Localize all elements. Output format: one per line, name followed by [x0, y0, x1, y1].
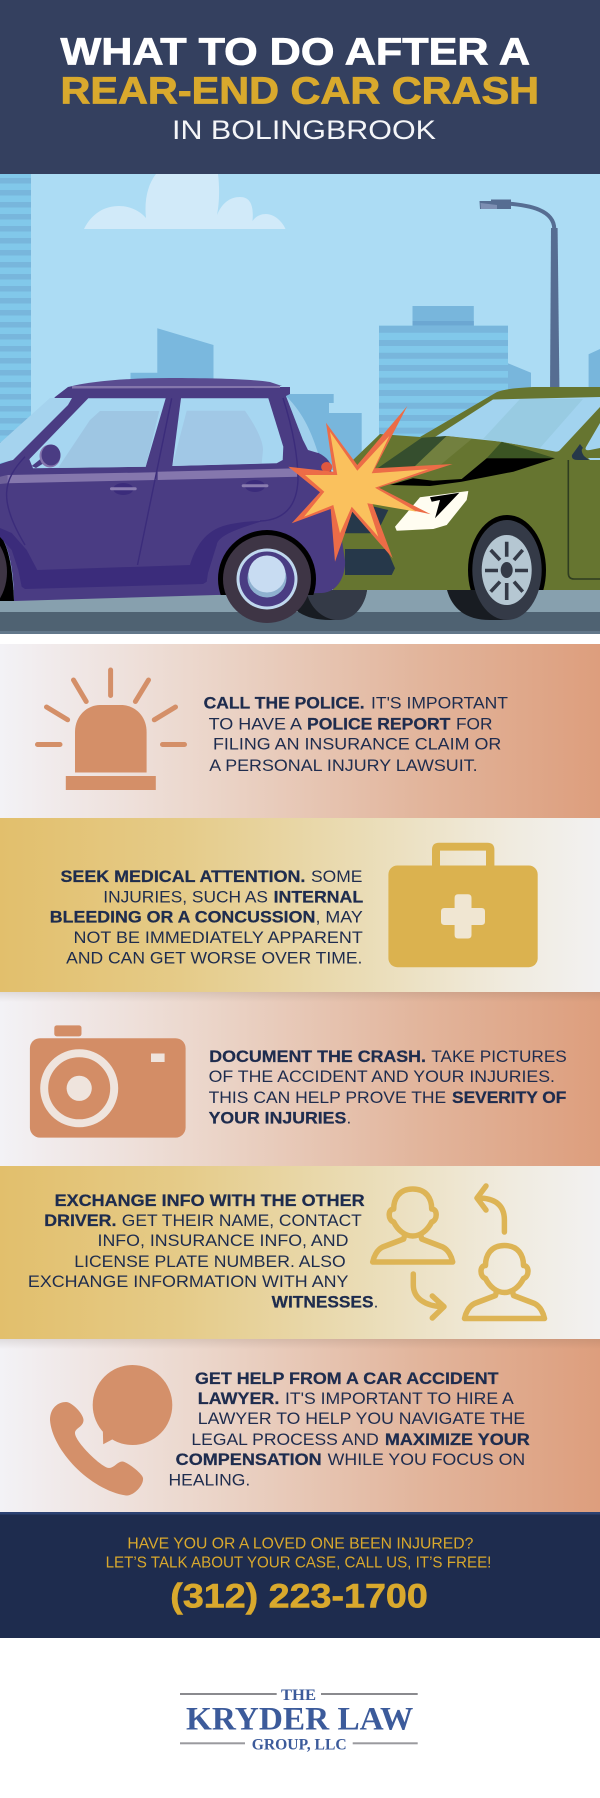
text: lawyer: LAWYER TO HELP YOU NAVIGATE THE: [198, 1409, 525, 1428]
text: lawyer: IT'S IMPORTANT TO HIRE A: [285, 1389, 514, 1408]
text: exchange info: DRIVER.: [44, 1211, 116, 1230]
rear wheel of green car: [297, 590, 367, 620]
panel: document the crash: [0, 992, 600, 1166]
purple car: [0, 378, 345, 628]
black gash: [390, 458, 555, 486]
logo: The Kryder Law Group, LLC: GROUP, LLC: [252, 1736, 347, 1753]
rear side window: [172, 398, 283, 466]
panel: exchange info: [0, 1166, 600, 1339]
text: lawyer: LAWYER.: [198, 1389, 279, 1408]
headlight: [395, 491, 468, 531]
sky: [4, 174, 600, 590]
icon: phone and speech bubble: [50, 1365, 172, 1496]
door handles: [110, 480, 268, 495]
text: exchange info: WITNESSES: [272, 1293, 374, 1312]
text: lawyer: [168, 1369, 530, 1490]
call to action text: LET’S TALK ABOUT YOUR CASE, CALL US, IT’S FREE!: [106, 1555, 491, 1572]
front wheel of green car: [447, 590, 507, 620]
text: lawyer: MAXIMIZE YOUR: [385, 1430, 530, 1449]
street lamp: [480, 200, 560, 395]
windshield: [435, 397, 600, 452]
text: exchange info: LICENSE PLATE NUMBER. ALSO: [74, 1252, 346, 1271]
logo: The Kryder Law Group, LLC: THE: [281, 1687, 316, 1704]
side window: [572, 423, 600, 460]
title: REAR-END CAR CRASH: [60, 71, 539, 113]
title: [60, 32, 539, 145]
panel: get help from a lawyer: [0, 1339, 600, 1512]
text: exchange info: EXCHANGE INFORMATION WITH ANY: [28, 1272, 349, 1291]
text: call the police: FOR: [456, 715, 492, 734]
text: exchange info: EXCHANGE INFO WITH THE OTHER: [55, 1191, 365, 1210]
person two: [464, 1246, 544, 1318]
text: call the police: [204, 694, 508, 775]
logo: The Kryder Law Group, LLC: KRYDER LAW: [186, 1701, 413, 1737]
text: document the crash: THIS CAN HELP PROVE THE: [209, 1088, 446, 1107]
text: document the crash: YOUR INJURIES: [209, 1108, 346, 1127]
door outline: [568, 460, 600, 579]
icon: police siren: [38, 670, 184, 790]
arrow down-right: [413, 1274, 444, 1318]
road: [0, 590, 600, 634]
text: call the police: POLICE REPORT: [307, 715, 451, 734]
call to action footer: [0, 1512, 600, 1638]
text: call the police: A PERSONAL INJURY LAWSUIT.: [209, 756, 478, 775]
call to action text: [106, 1536, 491, 1572]
icon: people exchanging info: [373, 1186, 544, 1318]
text: document the crash: [209, 1047, 567, 1127]
icon: camera: [30, 1025, 186, 1138]
icon: first aid kit: [388, 843, 538, 967]
left striped building: [0, 174, 31, 474]
text: exchange info: INFO, INSURANCE INFO, AND: [98, 1231, 348, 1250]
windshield of purple car: [0, 398, 72, 463]
text: document the crash: DOCUMENT THE CRASH.: [209, 1047, 426, 1066]
green car body: [333, 387, 600, 590]
arrow up-left: [477, 1186, 504, 1232]
text: exchange info: [28, 1191, 378, 1312]
text: document the crash: .: [346, 1108, 351, 1127]
panel: seek medical attention: [0, 818, 600, 992]
roof cap: [68, 378, 282, 387]
taillight: [321, 462, 332, 472]
mirror: [32, 444, 60, 468]
text: call the police: IT'S IMPORTANT: [371, 694, 508, 713]
belt strip: [7, 468, 298, 483]
phone number: (312) 223-1700: [170, 1578, 428, 1616]
person one: [373, 1189, 453, 1262]
header background: [0, 0, 600, 174]
building behind purple car: [286, 394, 362, 470]
text: seek medical attention: INTERNAL: [274, 887, 363, 906]
text: document the crash: SEVERITY OF: [452, 1088, 566, 1107]
cloud: [84, 174, 286, 229]
text: lawyer: COMPENSATION: [176, 1450, 322, 1469]
text: seek medical attention: NOT BE IMMEDIATELY APPARENT: [74, 928, 363, 947]
text: exchange info: .: [374, 1293, 378, 1312]
text: lawyer: GET HELP FROM A CAR ACCIDENT: [195, 1369, 499, 1388]
text: seek medical attention: BLEEDING OR A CONCUSSION: [50, 907, 315, 926]
text: lawyer: LEGAL PROCESS AND: [191, 1430, 379, 1449]
text: call the police: TO HAVE A: [209, 715, 303, 734]
text: seek medical attention: , MAY: [316, 907, 363, 926]
sill and wheel arch: [0, 521, 263, 589]
rear wheel: [218, 530, 316, 595]
text: document the crash: TAKE PICTURES: [431, 1047, 567, 1066]
text: seek medical attention: SOME: [311, 867, 362, 886]
green car: [284, 387, 600, 625]
tall striped tower: [379, 306, 531, 451]
logo: The Kryder Law Group, LLC: [180, 1687, 418, 1753]
center buildings: [130, 328, 214, 379]
text: call the police: FILING AN INSURANCE CLAIM OR: [213, 734, 501, 754]
crash star: [288, 406, 453, 562]
illustration: rear-end collision scene: [0, 174, 600, 634]
text: call the police: CALL THE POLICE.: [204, 694, 365, 713]
hood crumple: [378, 436, 447, 468]
text: seek medical attention: [50, 867, 363, 968]
text: lawyer: HEALING.: [168, 1471, 250, 1490]
text: document the crash: OF THE ACCIDENT AND YOUR INJURIES.: [209, 1067, 555, 1086]
front wheel: [0, 535, 14, 601]
text: seek medical attention: SEEK MEDICAL ATTENTION.: [60, 867, 305, 886]
rear glass sliver: [286, 396, 318, 453]
roof highlight: [72, 386, 280, 388]
front side window: [29, 398, 166, 468]
text: seek medical attention: AND CAN GET WORSE OVER TIME.: [66, 948, 362, 968]
text: seek medical attention: INJURIES, SUCH AS: [103, 887, 268, 906]
purple body: [0, 387, 345, 601]
title: IN BOLINGBROOK: [172, 115, 436, 145]
panel: call the police: [0, 644, 600, 818]
text: lawyer: WHILE YOU FOCUS ON: [328, 1450, 525, 1469]
title: WHAT TO DO AFTER A: [60, 32, 530, 74]
grille: [345, 506, 388, 534]
text: exchange info: GET THEIR NAME, CONTACT: [122, 1211, 362, 1230]
call to action text: HAVE YOU OR A LOVED ONE BEEN INJURED?: [127, 1536, 473, 1552]
door lines: [7, 398, 298, 565]
right distant building: [588, 349, 600, 387]
